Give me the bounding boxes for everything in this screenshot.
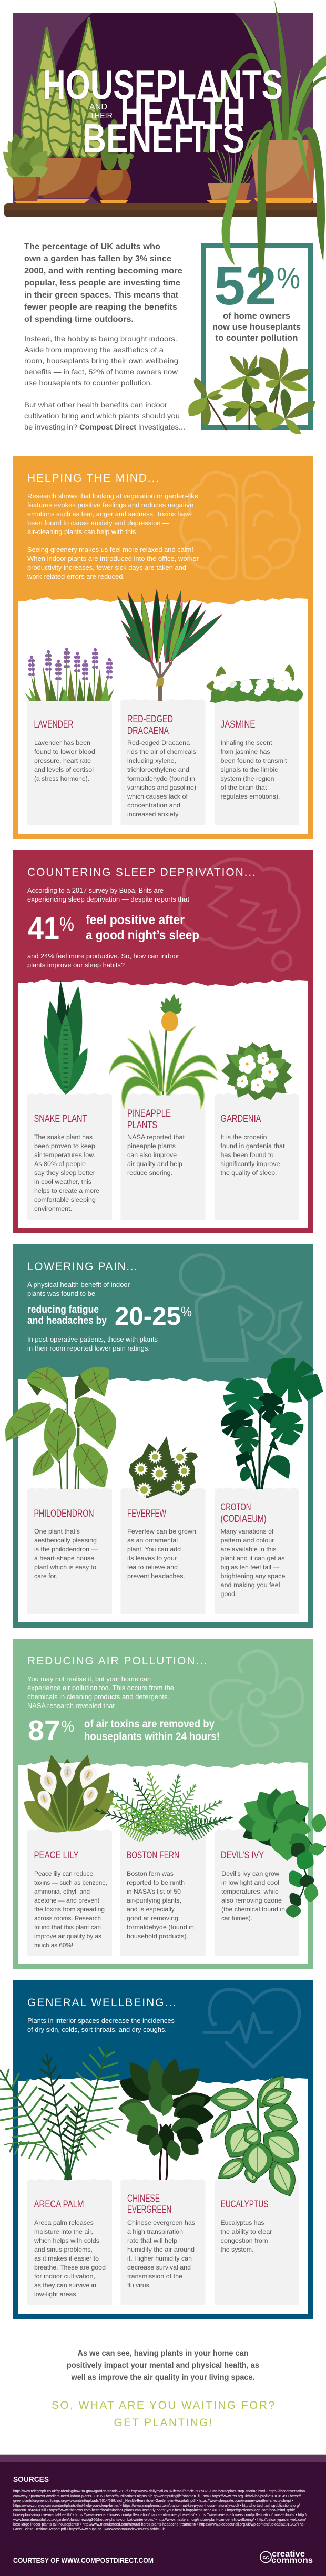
callout: 52 percent of home owners <box>203 246 310 427</box>
logo: creative commons <box>260 2550 313 2565</box>
card: feverfew: as an ornamental <box>127 1537 178 1544</box>
callout: 52 percent of home owners: of home owners <box>223 312 290 321</box>
icon: heart with pulse <box>204 1989 299 2067</box>
logo: creative commons: cc <box>262 2554 269 2561</box>
card: areca palm: as they can survive in <box>34 2282 96 2289</box>
sources list: best-large-indoor-plants-tall-houseplants/ • http://www.manukafeed.com/natural-herbs-plants-headache-treatment/ • https://www.sleepcouncil.org.uk/wp-content/uploads/2013/02/The- <box>13 2523 305 2527</box>
card: gardenia: significantly improve <box>221 1160 280 1168</box>
sources list: Great-British-Bedtime-Report.pdf • https://www.bupa.co.uk/newsroom/ourviews/sleep-habits-uk <box>13 2528 165 2531</box>
sources heading: SOURCES <box>13 2476 49 2484</box>
panel: helping the mind: been found to cause anxiety and depression — <box>27 519 169 527</box>
card: boston fern: formaldehyde (found in <box>127 1924 194 1931</box>
card: peace lily: much as 60%! <box>34 1941 73 1949</box>
card: feverfew: tea to relieve and <box>127 1563 178 1571</box>
panel: lowering pain <box>13 1244 313 1628</box>
card: gardenia <box>215 1093 299 1220</box>
card: lavender: found to lower blood <box>34 748 95 755</box>
card: lavender <box>27 699 112 825</box>
card: croton: good. <box>221 1590 237 1598</box>
card: boston fern: Boston fern was <box>127 1870 174 1877</box>
card: chinese evergreen: EVERGREEN <box>127 2204 171 2215</box>
card: chinese evergreen: a high transpiration <box>127 2228 183 2235</box>
card: red-edged dracaena <box>121 699 205 825</box>
card: boston fern: air-purifying plants, <box>127 1897 181 1904</box>
card: peace lily: ammonia, ethyl, and <box>34 1888 90 1895</box>
call to action heading <box>52 2399 274 2429</box>
card: lavender: pressure, heart rate <box>34 757 91 764</box>
plant: chinese evergreen <box>115 2057 215 2180</box>
plant: philodendron <box>5 1367 116 1489</box>
card: gardenia: found in gardenia that <box>221 1142 285 1150</box>
panel: helping the mind: Research shows that looking at vegetation or garden-like <box>27 493 198 500</box>
card: boston fern: good at removing <box>127 1915 178 1922</box>
card: gardenia: GARDENIA <box>221 1113 261 1125</box>
card: croton: and making you feel <box>221 1581 280 1589</box>
title: THEIR <box>90 111 113 120</box>
intro copy: be investing in? Compost Direct investigates... <box>24 423 185 431</box>
panel: hero background <box>13 13 313 203</box>
card: chinese evergreen: rate that will help <box>127 2237 177 2244</box>
plant: boston fern <box>91 1768 235 1844</box>
card: snake plant: environment. <box>34 1205 72 1212</box>
plant: peace lily <box>17 1752 122 1842</box>
callout: 52 percent of home owners: to counter pollution <box>216 334 298 343</box>
card: feverfew: prevent headaches. <box>127 1572 185 1580</box>
card: philodendron: care for. <box>34 1572 57 1580</box>
title: AND <box>89 103 107 111</box>
card: areca palm: ARECA PALM <box>34 2199 84 2210</box>
card: feverfew: its leaves to your <box>127 1555 177 1562</box>
card: areca palm <box>27 2179 112 2305</box>
plant: gardenia <box>221 1042 292 1100</box>
card: snake plant: air temperatures low. <box>34 1151 95 1159</box>
panel: helping the mind: emotions such as fear, anger and sadness. Toxins have <box>27 510 192 518</box>
panel: countering sleep deprivation: and 24% feel more productive. So, how can indoor <box>27 953 179 960</box>
title: BENEFITS <box>83 115 244 161</box>
card: gardenia: the quality of sleep. <box>221 1169 277 1177</box>
card: jasmine: been found to transmit <box>221 757 287 764</box>
logo: creative commons: creative <box>272 2550 305 2559</box>
plant: red-edged dracaena <box>114 589 225 701</box>
panel: general wellbeing: Plants in interior spaces decrease the incidences <box>27 2017 175 2025</box>
card: gardenia: It is the crocetin <box>221 1133 267 1141</box>
card: peace lily: found that this plant can <box>34 1924 101 1931</box>
intro copy: 2000, and with renting becoming more <box>24 267 182 275</box>
panel: lowering pain: A physical health benefit of indoor <box>27 1281 130 1289</box>
card: red-edged dracaena: concentration and <box>127 802 180 809</box>
card: feverfew: FEVERFEW <box>127 1508 166 1519</box>
stat: 20-25 percent: 20-25 <box>115 1303 181 1331</box>
card: peace lily: acetone — and prevent <box>34 1897 100 1904</box>
panel: general wellbeing: of dry skin, colds, sort throats, and dry coughs. <box>27 2026 167 2033</box>
card: areca palm: and sinus problems, <box>34 2246 93 2253</box>
card: lavender: (a stress hormone). <box>34 775 89 782</box>
stat: 41 percent: a good night’s sleep <box>86 928 199 943</box>
plant: succulent in small pot <box>0 131 54 203</box>
card: lavender: Lavender has been <box>34 739 90 747</box>
card: jasmine: system (the region <box>221 775 274 782</box>
sources list: greenplantsforgreenbuildings.org/wp-content/uploads/2014/09/Ulrich_Health-Benefits-of-Gardens-in-Hospitals.pdf • https://www.sleeprate.com/warmer-weather-affects-sleep/ • <box>13 2499 294 2503</box>
card: devil's ivy: car fumes). <box>221 1915 252 1922</box>
card: red-edged dracaena: rids the air of chemicals <box>127 748 196 755</box>
card: gardenia: has been found to <box>221 1151 274 1159</box>
logo: creative commons: commons <box>271 2556 313 2565</box>
card: pineapple plants: pineapple plants <box>127 1142 176 1150</box>
closing text: well as improve the air quality in your living space. <box>71 2373 254 2382</box>
plant: spider plant in big pot <box>206 0 326 204</box>
card: eucalyptus <box>215 2179 299 2305</box>
card: snake plant: The snake plant has <box>34 1133 93 1141</box>
card: peace lily: Peace lily can reduce <box>34 1870 93 1877</box>
plant: pineapple <box>109 994 218 1108</box>
card: philodendron: One plant that’s <box>34 1528 80 1535</box>
card: snake plant: in cool weather, this <box>34 1178 91 1185</box>
plant: leafy cuttings over callout <box>188 347 315 434</box>
panel: general wellbeing <box>13 1980 313 2319</box>
card: croton: (CODIAEUM) <box>221 1514 266 1525</box>
sources list: content/18/4/563.full • https://www.nbcnews.com/better/health/indoor-plants-can-instantly-boost-your-health-happiness-ncna781806 • https://gardencollage.com/heal/mind-spirit/ <box>13 2509 295 2512</box>
sources list: http://www.telegraph.co.uk/gardening/how-to-grow/garden-trends-2017/ • http://www.dailymail.co.uk/femail/article-5089829/Can-houseplant-stop-snoring.html • https://theconversation. <box>13 2490 306 2493</box>
sources list <box>13 2490 307 2531</box>
panel: helping the mind: features evokes positive feelings and reduces negative <box>27 502 193 509</box>
card: pineapple plants: NASA reported that <box>127 1133 185 1141</box>
intro copy: fewer people are reaping the benefits <box>24 303 177 312</box>
card: philodendron: PHILODENDRON <box>34 1508 94 1519</box>
card: lavender: LAVENDER <box>34 719 74 730</box>
stat: 41 percent <box>28 911 199 946</box>
card: snake plant <box>27 1093 112 1220</box>
card: snake plant: been proven to keep <box>34 1142 95 1150</box>
panel: countering sleep deprivation: COUNTERING SLEEP DEPRIVATION... <box>27 866 256 878</box>
intro copy: use houseplants to counter pollution. <box>24 379 152 387</box>
card: boston fern: and is especially <box>127 1906 175 1913</box>
intro copy: Instead, the hobby is being brought indoors. <box>24 334 177 343</box>
card: snake plant: helps to create a more <box>34 1187 99 1194</box>
card: eucalyptus: congestion from <box>221 2237 268 2244</box>
plant: snake plant <box>38 980 93 1097</box>
panel: lowering pain: LOWERING PAIN... <box>27 1261 137 1273</box>
stat: 20-25 percent: and headaches by <box>27 1315 107 1326</box>
stat: 41 percent: 41 <box>28 911 59 946</box>
card: pineapple plants: PINEAPPLE <box>127 1108 171 1119</box>
card: peace lily: the toxins from spreading <box>34 1906 105 1913</box>
card: peace lily: toxins — such as benzene, <box>34 1879 107 1886</box>
card: boston fern: BOSTON FERN <box>127 1850 179 1861</box>
card: pineapple plants: can also improve <box>127 1151 177 1159</box>
card: chinese evergreen: flu virus. <box>127 2282 151 2289</box>
intro copy: But what other health benefits can indoor <box>24 401 167 409</box>
card: croton: are available in this <box>221 1546 277 1553</box>
card: jasmine: signals to the limbic <box>221 766 278 773</box>
intro copy: The percentage of UK adults who <box>24 242 160 251</box>
card: boston fern: reported to be ninth <box>127 1879 185 1886</box>
card: pineapple plants: PLANTS <box>127 1120 157 1131</box>
courtesy line: COURTESY OF WWW.COMPOSTDIRECT.COM <box>13 2556 154 2564</box>
card: red-edged dracaena: Red-edged Dracaena <box>127 739 190 747</box>
card: areca palm: Areca palm releases <box>34 2219 94 2226</box>
card: red-edged dracaena: formaldehyde (found in <box>127 775 195 782</box>
card: boston fern: in NASA’s list of 50 <box>127 1888 181 1895</box>
panel: helping the mind: When indoor plants are introduced into the office, worker <box>27 555 199 563</box>
plant: jasmine <box>206 664 303 703</box>
card: red-edged dracaena: increased anxiety. <box>127 811 180 818</box>
callout: 52 percent of home owners: % <box>277 261 300 295</box>
intro copy: own a garden has fallen by 3% since <box>24 254 171 263</box>
card: red-edged dracaena: including xylene, <box>127 757 176 764</box>
call to action heading: SO, WHAT ARE YOU WAITING FOR? <box>52 2399 274 2411</box>
panel: helping the mind: Seeing greenery makes us feel more relaxed and calm! <box>27 546 193 554</box>
panel: helping the mind: air-cleaning plants can help with this. <box>27 528 138 536</box>
intro copy: popular, less people are investing time <box>24 279 180 288</box>
card: areca palm: moisture into the air, <box>34 2228 93 2235</box>
panel: countering sleep deprivation: plants improve our sleep habits? <box>27 962 125 969</box>
card: pineapple plants <box>121 1093 205 1220</box>
intro copy: cultivation bring and which plants should you <box>24 412 180 420</box>
plant: feverfew <box>129 1436 198 1498</box>
stat: 87 percent: houseplants within 24 hours! <box>84 1731 220 1743</box>
card: jasmine: JASMINE <box>221 719 256 730</box>
card: croton: big as ten feet tall — <box>221 1563 280 1571</box>
card: red-edged dracaena: which causes lack of <box>127 793 188 800</box>
card: devil's ivy: also removing ozone <box>221 1897 282 1904</box>
card: chinese evergreen: decrease survival and <box>127 2264 191 2271</box>
card: croton <box>215 1487 299 1614</box>
plant: croton <box>217 1351 326 1489</box>
card: chinese evergreen: it. Higher humidity can <box>127 2255 192 2262</box>
intro copy: benefits — in fact, 52% of home owners now <box>24 367 178 376</box>
stat: 41 percent: feel positive after <box>86 913 185 927</box>
card: eucalyptus: the ability to clear <box>221 2228 272 2235</box>
card: devil's ivy: Devil’s ivy can grow <box>221 1870 279 1877</box>
card: croton: brightening any space <box>221 1572 286 1580</box>
card: eucalyptus: EUCALYPTUS <box>221 2199 268 2210</box>
card: areca palm: breathe. These are good <box>34 2264 106 2271</box>
card: areca palm: which helps with colds <box>34 2237 99 2244</box>
card: croton: CROTON <box>221 1502 251 1513</box>
card: pineapple plants: air quality and help <box>127 1160 182 1168</box>
stat: 87 percent: 87 <box>28 1715 60 1746</box>
plant: cacti <box>100 119 134 170</box>
panel: countering sleep deprivation <box>13 850 313 1233</box>
card: boston fern: household products). <box>127 1933 188 1940</box>
card: areca palm: for indoor cultivation, <box>34 2273 95 2280</box>
card: croton: pattern and colour <box>221 1537 274 1544</box>
card: eucalyptus: Eucalyptus has <box>221 2219 264 2226</box>
card: peace lily: PEACE LILY <box>34 1850 79 1861</box>
stat: 87 percent: of air toxins are removed by <box>84 1718 215 1730</box>
footer band <box>0 2454 326 2576</box>
closing text: As we can see, having plants in your home can <box>78 2349 248 2358</box>
sources list: com/why-apartment-dwellers-need-indoor-plants-80196 • https://publications.nigms.nih.gov/computinglife/shaman_flu.htm • https://www.rhs.org.uk/advice/profile?PID=949 • https:// <box>13 2495 301 2498</box>
card: areca palm: low-light areas. <box>34 2291 78 2298</box>
card: devil's ivy: DEVIL’S IVY <box>221 1850 264 1861</box>
card: eucalyptus: the system. <box>221 2246 253 2253</box>
card: feverfew <box>121 1487 205 1614</box>
card: red-edged dracaena: trichloroethylene and <box>127 766 189 773</box>
card: devil's ivy: (the chemical found in <box>221 1906 285 1913</box>
card: jasmine: regulates emotions). <box>221 793 280 800</box>
plant: lavender <box>25 648 114 701</box>
card: snake plant: SNAKE PLANT <box>34 1113 87 1125</box>
card: chinese evergreen: Chinese evergreen has <box>127 2219 195 2226</box>
intro copy: Aside from improving the aesthetics of a <box>24 345 164 354</box>
title <box>43 62 283 161</box>
plant: areca palm <box>0 2042 129 2180</box>
plant: devil's ivy <box>238 1785 326 1918</box>
card: philodendron <box>27 1487 112 1614</box>
icon: fan <box>210 1651 303 1746</box>
icon: sleep cloud <box>180 859 299 970</box>
panel: reducing air pollution: You may not realise it, but your home can <box>27 1675 151 1683</box>
card: philodendron: a heart-shape house <box>34 1555 94 1562</box>
call to action heading: GET PLANTING! <box>114 2417 212 2429</box>
card: croton: plant and it can get as <box>221 1555 285 1562</box>
card: chinese evergreen <box>121 2179 205 2305</box>
card: jasmine: of the brain that <box>221 784 267 791</box>
stat: 20-25 percent <box>27 1303 192 1331</box>
card: feverfew: plant. You can add <box>127 1546 181 1553</box>
panel: lowering pain: In post-operative patients, those with plants <box>27 1336 158 1343</box>
card: jasmine: from jasmine has <box>221 748 270 755</box>
shelf <box>4 203 321 217</box>
panel: helping the mind <box>13 456 313 839</box>
card: devil's ivy: in low light and cool <box>221 1879 279 1886</box>
card: lavender: and levels of cortisol <box>34 766 94 773</box>
plant: tall snake plants <box>22 17 103 158</box>
sources list: www.housebeautiful.co.uk/garden/plants/news/g366/house-plants-combat-winter-blues/ • http://www.mastersh.org/indoor-plant-can-benefit-wellbeing/ • http://balconygardenweb.com/ <box>13 2518 306 2522</box>
card: philodendron: aesthetically pleasing <box>34 1537 97 1544</box>
icon: person in pain <box>180 1255 301 1360</box>
stat: 41 percent: % <box>59 913 74 935</box>
card: red-edged dracaena: varnishes and gasoline) <box>127 784 196 791</box>
card: devil's ivy: temperatures, while <box>221 1888 279 1895</box>
plant: eucalyptus <box>206 2069 308 2201</box>
closing text <box>67 2349 259 2382</box>
card: red-edged dracaena: RED-EDGED <box>127 714 173 725</box>
plant: hanging spider plant leaves <box>222 121 325 296</box>
plant: grass in pot <box>207 145 252 204</box>
intro copy: room, houseplants bring their own wellbeing <box>24 356 178 365</box>
panel: reducing air pollution <box>13 1639 313 1969</box>
panel: reducing air pollution: chemicals in cleaning products and detergents. <box>27 1693 169 1701</box>
card: jasmine <box>215 699 299 825</box>
stat: 20-25 percent: % <box>181 1304 192 1320</box>
pots: left group with saucers <box>35 158 131 203</box>
panel: countering sleep deprivation: experiencing sleep deprivation — despite reports that <box>27 896 190 903</box>
card: snake plant: As 80% of people <box>34 1160 86 1168</box>
card: philodendron: is the philodendron — <box>34 1546 98 1553</box>
closing text: positively impact your mental and physical health, as <box>67 2361 259 2370</box>
title: HEALTH <box>120 88 245 135</box>
intro copy: of spending time outdoors. <box>24 315 134 324</box>
card: chinese evergreen: humidify the air around <box>127 2246 195 2253</box>
card: chinese evergreen: CHINESE <box>127 2193 160 2204</box>
card: philodendron: plant which is easy to <box>34 1563 96 1571</box>
panel: general wellbeing: GENERAL WELLBEING... <box>27 1997 176 2009</box>
card: croton: Many variations of <box>221 1528 274 1535</box>
card: pineapple plants: reduce snoring. <box>127 1169 172 1177</box>
stat: 87 percent <box>28 1715 220 1746</box>
card: red-edged dracaena: DRACAENA <box>127 725 169 737</box>
panel: reducing air pollution: REDUCING AIR POLLUTION... <box>27 1655 207 1667</box>
stat: 87 percent: % <box>62 1717 74 1735</box>
sources list: houseplants-improve-mental-health/ • https://www.serenataflowers.com/pollennation/plants-anti-anxiety-benefits/ • https://www.serenataflowers.com/pollennation/house-plants/ • http:// <box>13 2513 307 2517</box>
panel: helping the mind: HELPING THE MIND... <box>27 472 159 484</box>
callout: 52 percent of home owners: 52 <box>214 255 277 316</box>
panel: helping the mind: productivity increases, fewer sick days are taken and <box>27 564 186 571</box>
panel: reducing air pollution: experience air pollution too. This occurs from the <box>27 1684 174 1692</box>
card: peace lily: improve air quality by as <box>34 1933 101 1940</box>
card: chinese evergreen: transmission of the <box>127 2273 182 2280</box>
panel: helping the mind: work-related errors are reduced. <box>27 573 125 580</box>
intro copy <box>24 242 185 431</box>
stat: 20-25 percent: reducing fatigue <box>27 1304 99 1315</box>
card: snake plant: comfortable sleeping <box>34 1196 96 1203</box>
panel: reducing air pollution: NASA research revealed that <box>27 1702 115 1710</box>
panel: lowering pain: plants was found to be <box>27 1290 95 1297</box>
card: peace lily: across rooms. Research <box>34 1915 101 1922</box>
card: boston fern <box>120 1829 206 1956</box>
card: jasmine: Inhaling the scent <box>221 739 272 747</box>
card: peace lily <box>27 1829 112 1956</box>
sources list: https://www.curejoy.com/content/plants-that-help-you-sleep-better/ • https://www.simplemost.com/plants-that-keep-your-house-naturally-cool/ • http://horttech.ashspublications.org/ <box>13 2504 300 2508</box>
card: snake plant: say they sleep better <box>34 1169 95 1177</box>
card: devil's ivy <box>215 1829 299 1956</box>
callout: 52 percent of home owners: now use houseplants <box>212 323 301 332</box>
intro copy: in their green spaces. This means that <box>24 291 178 300</box>
card: feverfew: Feverfew can be grown <box>127 1528 196 1535</box>
card: areca palm: as it makes it easier to <box>34 2255 99 2262</box>
panel: lowering pain: in their room reported lower pain ratings. <box>27 1345 150 1352</box>
icon: brain <box>181 472 299 579</box>
panel: countering sleep deprivation: According to a 2017 survey by Bupa, Brits are <box>27 887 164 894</box>
